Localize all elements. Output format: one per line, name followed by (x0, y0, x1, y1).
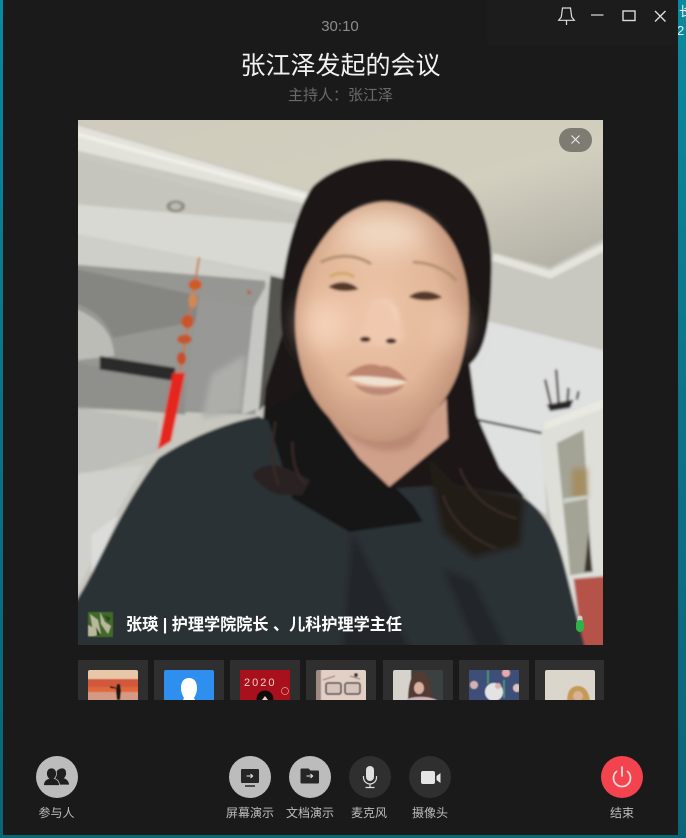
button: screen share: 屏幕演示 (226, 805, 274, 820)
button: end meeting (601, 756, 643, 820)
desktop text fragment at right edge: 2 (677, 23, 684, 38)
icon: microphone (364, 766, 376, 788)
glass cabinet (541, 400, 603, 645)
button: participants: 参与人 (38, 805, 75, 820)
thumbnail 4: face with glasses (306, 660, 376, 701)
button: camera: 摄像头 (412, 805, 448, 820)
icon: speaking volume (578, 618, 582, 628)
red ornament (158, 257, 252, 450)
button: camera (409, 756, 451, 820)
icon: maximize (623, 11, 635, 20)
window controls (559, 8, 666, 25)
thumbnail 7: blonde portrait (535, 660, 604, 701)
desktop text fragment at right edge (677, 4, 686, 38)
icon: power (614, 767, 630, 786)
hairline over forehead (304, 194, 438, 267)
icon: minimize (591, 14, 604, 16)
speaker avatar (88, 612, 113, 637)
icon: folder (300, 768, 319, 784)
back hair (262, 158, 524, 498)
video panel (68, 110, 614, 656)
speaker name caption: 张瑛 | 护理学院院长 、儿科护理学主任 (126, 614, 402, 634)
icon: monitor (241, 769, 259, 786)
button: microphone (349, 756, 391, 820)
icon: people (44, 768, 70, 786)
button: screen share (226, 756, 274, 820)
participant thumbnails (78, 660, 604, 700)
button: document share (286, 756, 334, 820)
thumbnail 6: floral illustration (459, 660, 529, 701)
thumbnail 3: 2020 card: 2020 (244, 677, 276, 689)
face highlights and shadows (339, 215, 426, 252)
recess (68, 264, 265, 415)
button: participants (36, 756, 78, 820)
icon: camera (421, 771, 440, 784)
neck (328, 398, 450, 488)
close video button (559, 128, 592, 152)
ceiling and beams (152, 120, 603, 268)
right wall and cornice (490, 236, 614, 358)
dark wall frame (259, 276, 289, 411)
button: document share: 文档演示 (286, 805, 334, 820)
eyes (328, 282, 359, 291)
coat (68, 416, 587, 656)
face (295, 202, 469, 441)
thumbnail 5: woman portrait (383, 660, 453, 701)
title: 张江泽发起的会议 (240, 52, 441, 80)
toolbar (36, 756, 643, 820)
person (68, 159, 587, 656)
timer: 30:10 (321, 18, 359, 35)
host line: 主持人：张江泽 (288, 87, 393, 104)
thumbnail 1: sunset (78, 660, 148, 701)
button: microphone: 麦克风 (351, 806, 387, 820)
eyebrows (321, 256, 371, 264)
thumbnail 2: blue silhouette (154, 660, 224, 700)
nose (362, 302, 402, 343)
button: end meeting: 结束 (610, 806, 634, 820)
hair strands over coat (252, 465, 311, 495)
lips (346, 364, 408, 381)
collar (268, 420, 422, 532)
icon: pin (559, 8, 574, 25)
icon: close (655, 11, 666, 22)
thumbnail 3: 2020 card (230, 660, 300, 700)
